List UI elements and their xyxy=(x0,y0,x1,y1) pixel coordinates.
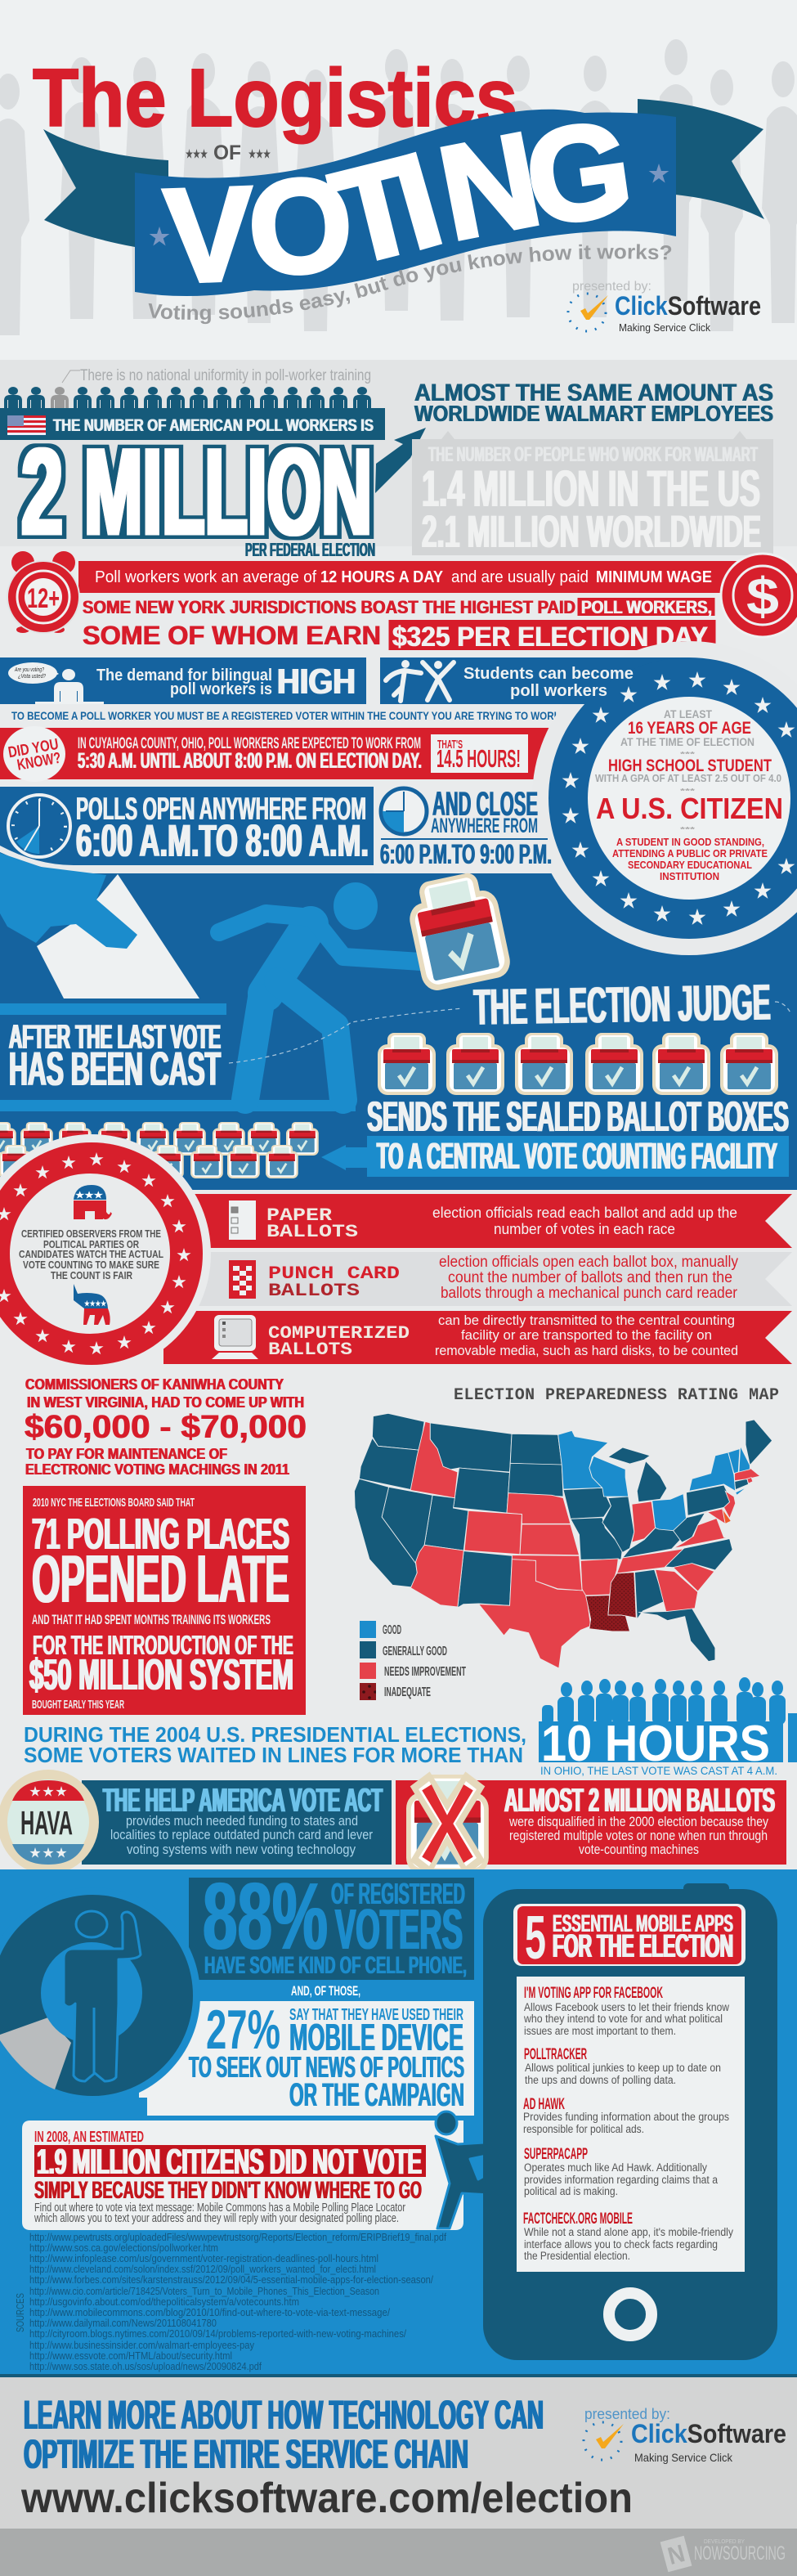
footer sponsor logo: Making Service Click xyxy=(634,2451,733,2464)
seal text: INSTITUTION xyxy=(660,870,719,882)
panel: 1.9 million citizens: IN 2008, AN ESTIMATED xyxy=(34,2129,144,2145)
arrow to ballot pile xyxy=(321,1145,367,1170)
band: hours and wage xyxy=(78,561,737,593)
illustration: runner xyxy=(219,882,433,1100)
stat: 10 hours: IN OHIO, THE LAST VOTE WAS CAST AT 4 A.M. xyxy=(540,1764,777,1777)
panel: 27 percent: 27% xyxy=(206,1999,280,2061)
panel: bilingual poll workers: HIGH xyxy=(277,662,356,702)
icon: paper ballot xyxy=(229,1200,256,1240)
developer credit: N xyxy=(665,2540,687,2570)
and, of those: AND, OF THOSE, xyxy=(291,1983,360,1999)
sponsor logo xyxy=(568,280,761,334)
icon: alarm clock 12+: 12+ xyxy=(27,583,60,614)
panel: 2 million ballots: vote-counting machines xyxy=(579,1842,699,1857)
sponsor logo: presented by: xyxy=(572,280,651,294)
row of ballot boxes xyxy=(378,1033,778,1095)
panel: HAVA: provides much needed funding to states and xyxy=(126,1813,358,1829)
text: kaniwha county: COMMISSIONERS OF KANIWHA COUNTY xyxy=(25,1376,284,1393)
developer credit xyxy=(660,2536,786,2572)
panel: 71 polling places: OPENED LATE xyxy=(32,1541,289,1617)
icon: HAVA badge: HAVA xyxy=(20,1804,73,1842)
observers text: VOTE COUNTING TO MAKE SURE xyxy=(23,1259,159,1271)
text: students can become poll workers: poll workers xyxy=(510,682,607,700)
panel: HAVA xyxy=(82,1780,392,1865)
highest paid text: POLL WORKERS, xyxy=(581,597,712,617)
sources: http://www.forbes.com/sites/karstenstrauss/2012/09/04/5-essential-mobile-apps-for-election-season/ xyxy=(29,2273,433,2286)
ribbon main xyxy=(135,110,676,296)
ribbons: ballot types xyxy=(163,1194,792,1364)
seal text: 16 YEARS OF AGE xyxy=(628,719,751,738)
panel: did you know: IN CUYAHOGA COUNTY, OHIO, POLL WORKERS ARE EXPECTED TO WORK FROM xyxy=(78,735,421,752)
phone screen: the ups and downs of polling data. xyxy=(525,2074,676,2086)
panel: 1.9 million citizens: which allows you to text your address and they will reply with your designated polling place. xyxy=(34,2211,399,2225)
text: students can become poll workers: Students can become xyxy=(463,665,634,683)
text: waited in lines: DURING THE 2004 U.S. PRESIDENTIAL ELECTIONS, xyxy=(24,1722,526,1747)
section background: poll workers xyxy=(0,360,797,546)
map legend: INADEQUATE xyxy=(384,1685,431,1699)
footer sponsor logo: ClickSoftware xyxy=(631,2419,786,2448)
stat: 10 hours: 10 HOURS xyxy=(541,1716,770,1772)
did you know badge: KNOW? xyxy=(16,750,62,774)
arrow to walmart xyxy=(375,428,426,493)
white curve above hand xyxy=(0,846,374,873)
panel: 88 percent xyxy=(189,1863,474,1980)
icon: person with phone xyxy=(64,1911,141,2081)
panel: 1.9 million citizens xyxy=(22,2120,463,2230)
panel: polls open: 6:00 A.M.TO 8:00 A.M. xyxy=(76,815,369,866)
states: needs improvement xyxy=(410,1421,760,1668)
polls close block: AND CLOSE xyxy=(432,784,538,823)
icon: close clock xyxy=(381,788,427,834)
panel: mobile section background xyxy=(0,1869,797,2377)
phone header: 5 xyxy=(525,1903,546,1972)
panel: 71 polling places: 71 POLLING PLACES xyxy=(32,1510,289,1559)
icon: ballot box with X xyxy=(406,1775,489,1874)
phone screen: Operates much like Ad Hawk. Additionally xyxy=(524,2161,707,2174)
footer background xyxy=(0,2377,797,2576)
footer sponsor logo: presented by: xyxy=(584,2406,670,2422)
icon: bilingual speaker: Are you voting? xyxy=(14,667,44,673)
panel: polls open: POLLS OPEN ANYWHERE FROM xyxy=(76,792,366,827)
text: waited in lines xyxy=(24,1722,526,1767)
ribbon 2: punch card ballots xyxy=(229,1254,738,1302)
phone home button xyxy=(609,2293,651,2336)
seal text: *** xyxy=(680,751,696,758)
illustration: big ballot box xyxy=(402,868,513,993)
panel: 27 percent: TO SEEK OUT NEWS OF POLITICS xyxy=(189,2050,464,2084)
sources: SOURCES xyxy=(14,2293,26,2332)
did you know badge: DID YOU xyxy=(7,736,60,761)
band: hours and wage: Poll workers work an average of xyxy=(95,568,316,586)
sources: http://www.dailymail.com/News/201108041780 xyxy=(29,2317,217,2329)
map legend: GENERALLY GOOD xyxy=(383,1645,447,1658)
text: kaniwha county: ELECTRONIC VOTING MACHINGS IN 2011 xyxy=(25,1461,289,1478)
illustration: ballot in hand xyxy=(0,853,199,999)
big number: 2 million: 2 xyxy=(21,423,63,560)
icon: democrat donkey: ★★★★ xyxy=(84,1299,107,1308)
footer url: www.clicksoftware.com/election xyxy=(20,2475,633,2522)
panel: 1.9 million citizens: Find out where to vote via text message: Mobile Commons has a Mobile Polling Place Locator xyxy=(34,2201,405,2215)
panel: 71 polling places: BOUGHT EARLY THIS YEAR xyxy=(32,1698,124,1712)
panel: did you know: THAT'S xyxy=(437,738,463,752)
map legend xyxy=(360,1621,466,1700)
heading: walmart comparison: ALMOST THE SAME AMOUNT AS xyxy=(414,379,773,406)
ribbon 3: computerized ballots: removable media, such as hard disks, to be counted xyxy=(435,1343,738,1358)
highest paid text xyxy=(83,597,715,653)
developer credit: DEVELOPED BY xyxy=(704,2539,745,2545)
footer call to action: OPTIMIZE THE ENTIRE SERVICE CHAIN xyxy=(24,2431,468,2477)
sources: http://www.sos.ca.gov/elections/pollworker.htm xyxy=(29,2242,218,2254)
seal: citizen requirements xyxy=(548,657,797,939)
big number: 2 million xyxy=(21,423,372,560)
highest paid text: SOME OF WHOM EARN xyxy=(83,621,381,650)
ribbon 2: punch card ballots: ballots through a mechanical punch card reader xyxy=(441,1285,738,1302)
phone screen: Allows political junkies to keep up to date on xyxy=(525,2062,721,2074)
waiting line crowd xyxy=(542,1677,797,1762)
text: kaniwha county xyxy=(25,1376,307,1478)
title: The Logistics: The Logistics xyxy=(33,52,517,144)
observers text xyxy=(19,1227,163,1281)
map: election preparedness xyxy=(354,1413,772,1668)
title: of: OF xyxy=(213,141,241,164)
map legend: GOOD xyxy=(383,1623,401,1637)
ribbon 3: computerized ballots: can be directly transmitted to the central counting xyxy=(438,1313,735,1328)
panel: 71 polling places xyxy=(23,1486,306,1715)
text: after the last vote xyxy=(9,1017,221,1096)
phone screen: AD HAWK xyxy=(523,2096,565,2113)
seal text: AT THE TIME OF ELECTION xyxy=(620,735,754,748)
states: good xyxy=(558,1430,750,1531)
highest paid text: $325 PER ELECTION DAY xyxy=(392,622,708,653)
panel: 88 percent: 88% xyxy=(203,1863,328,1969)
ribbon 1: paper ballots: BALLOTS xyxy=(266,1222,358,1242)
icon: computer xyxy=(212,1315,258,1359)
band: hours and wage: MINIMUM WAGE xyxy=(596,568,712,586)
sources: http://www.sos.state.oh.us/sos/upload/news/20090824.pdf xyxy=(29,2360,262,2372)
phone screen: While not a stand alone app, it's mobile-friendly xyxy=(524,2226,733,2238)
floor bar xyxy=(0,1100,356,1111)
band: hours and wage: 12 HOURS A DAY xyxy=(320,568,444,586)
panel: 71 polling places: AND THAT IT HAD SPENT MONTHS TRAINING ITS WORKERS xyxy=(32,1612,271,1627)
observers text: CERTIFIED OBSERVERS FROM THE xyxy=(21,1227,161,1240)
ribbon 2: punch card ballots: BALLOTS xyxy=(268,1281,360,1301)
halo of citizen seal xyxy=(532,641,797,955)
big number: 2 million: MILLION xyxy=(84,423,372,560)
panel: 88 percent: VOTERS xyxy=(335,1897,463,1961)
ribbon 1: paper ballots: election officials read each ballot and add up the xyxy=(432,1205,737,1221)
ribbon 2: punch card ballots: election officials open each ballot box, manually xyxy=(439,1254,738,1271)
phone screen: interface allows you to check facts regarding xyxy=(524,2238,718,2251)
icon: walking person xyxy=(436,2112,504,2228)
ribbon 1: paper ballots: PAPER xyxy=(266,1205,333,1226)
panel: 1.9 million citizens: SIMPLY BECAUSE THEY DIDN'T KNOW WHERE TO GO xyxy=(34,2177,422,2204)
sponsor logo: ClickSoftware xyxy=(615,291,761,321)
seal text: ATTENDING A PUBLIC OR PRIVATE xyxy=(612,847,768,859)
panel: bilingual poll workers: poll workers is xyxy=(170,680,272,698)
subtitle on curve: Voting sounds easy, but do you know how it works? xyxy=(149,244,672,324)
panel: 1.9 million citizens: 1.9 MILLION CITIZENS DID NOT VOTE xyxy=(37,2142,422,2182)
sources: http://www.cleveland.com/solon/index.ssf/2012/09/poll_workers_wanted_for_electi.html xyxy=(29,2263,376,2275)
phone: 5 essential mobile apps xyxy=(483,1883,777,2360)
did you know badge xyxy=(3,726,65,782)
observers text: CANDIDATES WATCH THE ACTUAL xyxy=(19,1248,163,1260)
ribbon 3: computerized ballots: facility or are transported to the facility on xyxy=(461,1327,712,1343)
title: of xyxy=(186,141,271,164)
phone screen: issues are most important to them. xyxy=(524,2025,676,2037)
sources: http://www.businessinsider.com/walmart-employees-pay xyxy=(29,2339,254,2351)
ribbon 2: punch card ballots: PUNCH CARD xyxy=(268,1263,400,1284)
observers text: POLITICAL PARTIES OR xyxy=(43,1238,139,1250)
phone screen: SUPERPACAPP xyxy=(524,2146,588,2163)
panel: HAVA: localities to replace outdated punch card and lever xyxy=(110,1827,373,1842)
per federal election: PER FEDERAL ELECTION xyxy=(245,539,375,560)
map legend: NEEDS IMPROVEMENT xyxy=(384,1665,466,1679)
ribbon 3: computerized ballots: COMPUTERIZED xyxy=(268,1323,410,1344)
polls close block: ANYWHERE FROM xyxy=(431,815,538,837)
note: training: There is no national uniformity in poll-worker training xyxy=(80,367,371,384)
panel: 88 percent: OF REGISTERED xyxy=(331,1877,465,1910)
icon: republican elephant: ★★★ xyxy=(75,1191,103,1200)
phone screen: who they intend to vote for and what political xyxy=(523,2013,723,2025)
seal text: *** xyxy=(680,788,696,795)
dashed path xyxy=(229,1002,791,1063)
panel: did you know: 14.5 HOURS! xyxy=(437,744,521,773)
panel: 27 percent: SAY THAT THEY HAVE USED THEIR xyxy=(289,2006,463,2024)
text: kaniwha county: IN WEST VIRGINIA, HAD TO COME UP WITH xyxy=(27,1394,304,1411)
sources: http://usgovinfo.about.com/od/thepoliticalsystem/a/votecounts.htm xyxy=(29,2296,299,2308)
states: generally good xyxy=(354,1413,772,1662)
icon: HAVA badge xyxy=(0,1770,99,1874)
ribbon stars xyxy=(150,164,669,246)
phone screen: Allows Facebook users to let their friends know xyxy=(524,2001,729,2013)
seal stars xyxy=(562,671,795,925)
icon row: poll workers xyxy=(4,387,371,408)
sources xyxy=(14,2231,446,2372)
polls close block: 6:00 P.M.TO 9:00 P.M. xyxy=(380,839,552,870)
highest paid text: SOME NEW YORK JURISDICTIONS BOAST THE HIGHEST PAID xyxy=(83,597,575,617)
panel: 27 percent xyxy=(139,1999,474,2116)
footer sponsor logo xyxy=(584,2406,786,2464)
phone screen: political ad is making. xyxy=(524,2185,618,2197)
panel: HAVA: THE HELP AMERICA VOTE ACT xyxy=(103,1781,383,1819)
phone screen: responsible for political ads. xyxy=(523,2123,644,2135)
phone screen: provides information regarding claims that a xyxy=(524,2174,718,2186)
text: kaniwha county: TO PAY FOR MAINTENANCE OF xyxy=(26,1446,227,1462)
phone screen: POLLTRACKER xyxy=(524,2046,587,2063)
sources: http://www.infoplease.com/us/government/voter-registration-deadlines-poll-hours.html xyxy=(29,2252,378,2264)
panel: bilingual poll workers: The demand for bilingual xyxy=(96,666,272,684)
observers text: THE COUNT IS FAIR xyxy=(51,1269,132,1281)
icon: democrat donkey xyxy=(74,1284,110,1325)
icon: open clock xyxy=(8,795,70,857)
sources: http://www.essvote.com/HTML/about/security.html xyxy=(29,2349,232,2362)
panel: HAVA: voting systems with new voting technology xyxy=(127,1842,356,1857)
ballot box pile xyxy=(0,1122,319,1178)
band: hours and wage: and are usually paid xyxy=(451,568,589,586)
panel: polls open xyxy=(0,787,374,866)
text: after the last vote: HAS BEEN CAST xyxy=(9,1043,221,1096)
panel: 71 polling places: 2010 NYC THE ELECTIONS BOARD SAID THAT xyxy=(33,1496,195,1510)
ribbon tails xyxy=(43,99,764,270)
phone header xyxy=(513,1903,746,1972)
footer call to action xyxy=(24,2392,544,2477)
seal text xyxy=(595,707,783,882)
icon: bilingual speaker: ¿Vota usted? xyxy=(18,674,46,680)
polls close block xyxy=(380,784,552,870)
text: after the last vote: AFTER THE LAST VOTE xyxy=(9,1017,221,1056)
icon: dollar coin xyxy=(721,554,797,637)
header background xyxy=(0,0,797,360)
phone screen: the Presidential election. xyxy=(524,2250,630,2262)
ribbon 1: paper ballots: number of votes in each race xyxy=(494,1221,675,1237)
panel: 2 million ballots xyxy=(396,1780,786,1865)
icon: republican elephant xyxy=(74,1185,112,1219)
icon: dollar coin: $ xyxy=(746,567,779,626)
panel: 88 percent: HAVE SOME KIND OF CELL PHONE, xyxy=(204,1952,467,1979)
seal text: SECONDARY EDUCATIONAL xyxy=(628,859,752,871)
panel: bilingual poll workers xyxy=(0,657,366,704)
panel: 27 percent: MOBILE DEVICE xyxy=(289,2016,463,2058)
text: students can become poll workers xyxy=(463,665,634,700)
text: registered voter: TO BECOME A POLL WORKER YOU MUST BE A REGISTERED VOTER WITHIN THE COUNTY YOU ARE TRYING TO WORK xyxy=(11,709,561,722)
icon: punch card xyxy=(229,1260,256,1299)
sources: http://www.cio.com/article/718425/Voters_Turn_to_Mobile_Phones_This_Election_Season xyxy=(29,2285,379,2297)
pie chart with phone user xyxy=(0,1887,200,2103)
ribbon 3: computerized ballots: BALLOTS xyxy=(268,1340,352,1360)
ribbon 2: punch card ballots: count the number of ballots and then run the xyxy=(448,1269,732,1286)
ribbon 1: paper ballots xyxy=(229,1200,737,1242)
heading: walmart comparison xyxy=(414,379,773,426)
panel: 71 polling places: $50 MILLION SYSTEM xyxy=(29,1650,293,1699)
icon: flag xyxy=(7,415,46,435)
seal: certified observers xyxy=(0,1134,211,1373)
icon: alarm clock 12+ xyxy=(7,551,79,633)
seal text: AT LEAST xyxy=(664,707,712,720)
states: inadequate xyxy=(586,1573,636,1631)
panel: 27 percent: OR THE CAMPAIGN xyxy=(289,2077,464,2113)
sources: http://www.pewtrusts.org/uploadedFiles/wwwpewtrustsorg/Reports/Election_reform/ERIPBrief19_final.pdf xyxy=(29,2231,446,2243)
title: VOTING: VOTING xyxy=(162,92,640,311)
sources: http://www.mobilecommons.com/blog/2010/10/find-out-where-to-vote-via-text-message/ xyxy=(29,2306,390,2318)
panel: big blue section background xyxy=(0,852,797,1190)
silhouette crowd xyxy=(0,39,797,335)
map title: ELECTION PREPAREDNESS RATING MAP xyxy=(454,1386,779,1405)
panel: students xyxy=(380,657,689,704)
text: waited in lines: SOME VOTERS WAITED IN LINES FOR MORE THAN xyxy=(24,1743,523,1767)
panel: 71 polling places: FOR THE INTRODUCTION OF THE xyxy=(33,1630,293,1660)
title: of: ★★★ xyxy=(249,147,271,160)
seal text: *** xyxy=(680,826,696,833)
panel: did you know: 5:30 A.M. UNTIL ABOUT 8:00 P.M. ON ELECTION DAY. xyxy=(78,748,422,773)
banner: number of poll workers: THE NUMBER OF AMERICAN POLL WORKERS IS xyxy=(53,416,374,435)
sources: http://cityroom.blogs.nytimes.com/2010/09/14/problems-reported-with-new-voting-machines/ xyxy=(29,2327,406,2340)
observers stars xyxy=(0,1152,191,1354)
seal text: A STUDENT IN GOOD STANDING, xyxy=(616,836,764,848)
icon: bilingual speaker xyxy=(8,662,104,704)
panel: walmart employees xyxy=(412,431,773,557)
sponsor logo: Making Service Click xyxy=(619,321,710,334)
phone screen xyxy=(517,1977,745,2272)
phone screen: I'M VOTING APP FOR FACEBOOK xyxy=(524,1985,663,2002)
banner: number of poll workers xyxy=(0,408,385,440)
text: kaniwha county: $60,000 - $70,000 xyxy=(25,1409,307,1445)
title: of: ★★★ xyxy=(186,147,208,160)
phone screen: FACTCHECK.ORG MOBILE xyxy=(523,2210,633,2228)
panel: did you know xyxy=(0,726,549,782)
phone screen: Provides funding information about the groups xyxy=(523,2111,729,2123)
icon: student figures xyxy=(386,660,454,701)
bar under ballot xyxy=(0,1003,226,1015)
ribbon 3: computerized ballots xyxy=(212,1313,738,1360)
